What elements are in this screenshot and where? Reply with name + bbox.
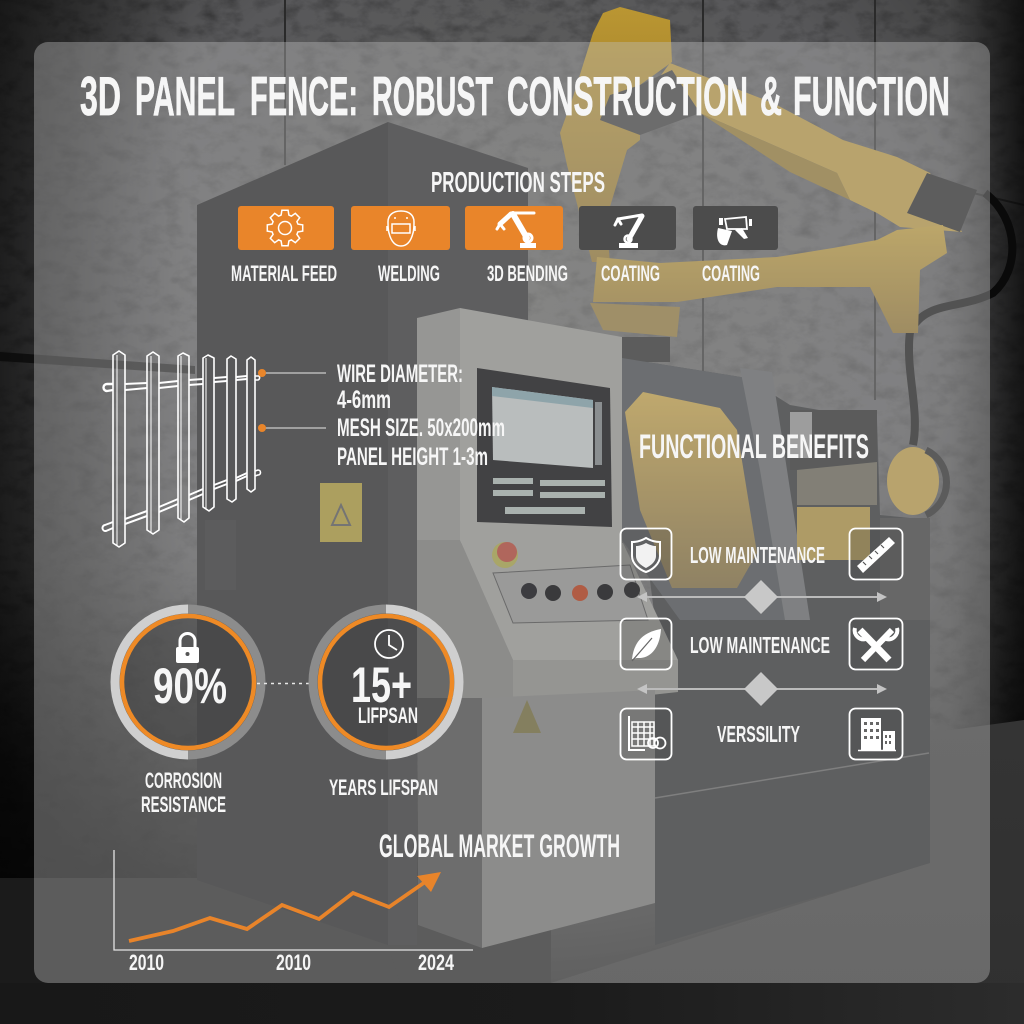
stat: 15+ years lifespan: LIFPSAN	[358, 703, 418, 728]
stat: 90% corrosion resistance: RESISTANCE	[141, 792, 226, 817]
step: material feed: MATERIAL FEED	[231, 261, 337, 286]
stat: 90% corrosion resistance	[115, 609, 261, 817]
spec text: MESH SIZE. 50x200mm	[337, 414, 505, 442]
step: coating sprayer: COATING	[702, 261, 760, 286]
warning sign on column	[320, 483, 362, 542]
icon: factory grid	[620, 708, 672, 760]
icon: padlock	[176, 634, 199, 663]
icon: shield	[620, 528, 672, 580]
chart axes	[114, 850, 473, 950]
stat: 15+ years lifespan	[313, 609, 459, 800]
callout leader: mesh size	[258, 424, 326, 432]
fence panel diagram	[102, 351, 261, 547]
spec text: 4-6mm	[337, 386, 391, 414]
icon: leaf	[620, 618, 672, 670]
title: CONSTRUCTION	[507, 65, 748, 127]
chart: global market growth	[114, 828, 620, 975]
stat: 15+ years lifespan: 15+	[351, 657, 412, 713]
robot upper arm	[560, 7, 672, 262]
step: coating robot	[579, 206, 676, 286]
title: PANEL	[135, 65, 235, 127]
callout: wire and mesh specifications	[258, 360, 505, 471]
growth line with arrow	[129, 872, 441, 941]
x axis labels	[129, 950, 455, 975]
x axis labels: 2010	[129, 950, 164, 975]
control panel plate	[493, 565, 648, 623]
stat: 90% corrosion resistance: 90%	[153, 658, 227, 714]
arrow divider	[637, 580, 887, 614]
spec text: PANEL HEIGHT 1-3m	[337, 443, 488, 471]
step: welding	[351, 206, 450, 286]
title: 3D	[80, 65, 121, 127]
machine buttons	[492, 542, 640, 601]
x axis labels: 2024	[418, 950, 455, 975]
floor	[0, 878, 551, 1024]
dark column	[197, 122, 388, 945]
step: 3D bending	[465, 206, 568, 286]
right machine	[622, 358, 930, 945]
gripper	[887, 447, 947, 515]
spec text	[337, 360, 505, 471]
section: functional benefits	[620, 428, 902, 760]
stat: 15+ years lifespan: YEARS LIFSPAN	[329, 775, 438, 800]
section: production steps	[231, 167, 778, 286]
spec text: WIRE DIAMETER:	[337, 360, 463, 388]
x axis labels: 2010	[276, 950, 311, 975]
title: ROBUST	[372, 65, 493, 127]
arrow divider	[637, 672, 887, 706]
title: &	[760, 65, 782, 127]
connector: dotted line	[257, 682, 318, 684]
icon: buildings	[850, 708, 902, 760]
icon: wrench and ruler	[850, 618, 902, 670]
icon: ruler	[850, 528, 902, 580]
robot cables	[909, 193, 1012, 445]
title	[80, 65, 950, 127]
robot lower arm	[593, 225, 947, 333]
step: welding: WELDING	[378, 261, 440, 286]
chart title: GLOBAL MARKET GROWTH	[379, 828, 620, 864]
machine monitor	[477, 368, 612, 527]
heading: production steps: PRODUCTION STEPS	[431, 167, 605, 199]
control cabinet	[417, 308, 460, 540]
title: FENCE:	[250, 65, 358, 127]
step: material feed	[231, 206, 337, 286]
label: versatility: VERSSILITY	[717, 721, 800, 747]
label: low maintenance: LOW MAINTENANCE	[690, 632, 830, 658]
stat: 90% corrosion resistance: CORROSION	[145, 768, 222, 793]
callout leader: wire diameter	[258, 369, 326, 377]
label: low maintenance: LOW MAINTENANCE	[690, 542, 825, 568]
step: coating robot: COATING	[601, 261, 660, 286]
step: 3D bending: 3D BENDING	[487, 261, 568, 286]
step: coating sprayer	[693, 206, 778, 286]
icon: clock	[375, 630, 403, 658]
